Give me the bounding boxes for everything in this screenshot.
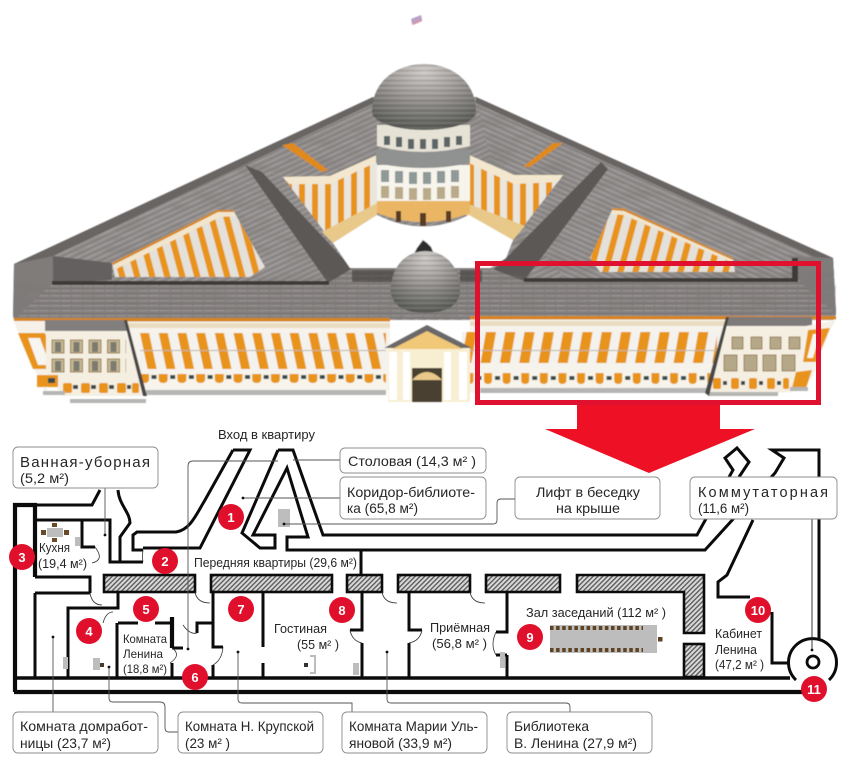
leader lines bbox=[52, 460, 813, 732]
label: Maria Ulyanova's room: яновой (33,9 м²) bbox=[349, 735, 452, 751]
room names on plan: Передняя квартиры (29,6 м²) bbox=[194, 555, 357, 570]
roof: dark ridges bbox=[14, 97, 833, 283]
label: maid's room: Комната домработ- bbox=[20, 718, 148, 734]
numbered markers: 6 bbox=[191, 670, 199, 685]
numbered markers: 11 bbox=[807, 682, 821, 697]
label: corridor library bbox=[340, 477, 486, 519]
label: Krupskaya's room: Комната Н. Крупской bbox=[185, 718, 314, 734]
roof: outer pentagon bbox=[13, 97, 836, 320]
furniture bbox=[41, 509, 505, 675]
label: dining room: Столовая (14,3 м² ) bbox=[348, 453, 476, 469]
label: Maria Ulyanova's room: Комната Марии Уль- bbox=[349, 718, 478, 734]
label: maid's room: ницы (23,7 м²) bbox=[20, 735, 111, 751]
front small dome with statue bbox=[391, 240, 460, 313]
numbered markers: 10 bbox=[751, 603, 765, 618]
hatched structural walls bbox=[104, 575, 704, 677]
front roof weathering bbox=[14, 270, 836, 318]
room names on plan: (19,4 м²) bbox=[38, 556, 87, 571]
left hip bbox=[13, 256, 53, 317]
facade right bbox=[462, 316, 836, 393]
room names on plan: Кухня bbox=[39, 540, 70, 555]
numbered markers: 2 bbox=[161, 554, 169, 569]
round tower bbox=[789, 639, 837, 680]
red arrow bbox=[545, 405, 755, 473]
front roof bbox=[13, 258, 836, 319]
label: Lenin's library bbox=[507, 712, 652, 753]
door arcs bbox=[90, 547, 496, 665]
right hip bbox=[790, 256, 836, 314]
back roof weathering bbox=[14, 97, 836, 316]
conference table bbox=[550, 625, 662, 653]
room names on plan: Комната bbox=[123, 632, 167, 646]
room names on plan: (47,2 м² ) bbox=[715, 657, 764, 672]
label: bathroom: (5,2 м²) bbox=[20, 470, 69, 486]
label: bathroom bbox=[13, 447, 158, 488]
numbered markers: 4 bbox=[85, 624, 93, 639]
caption: entrance: Вход в квартиру bbox=[218, 427, 315, 442]
label: lift bbox=[515, 477, 660, 519]
label: maid's room bbox=[13, 712, 158, 753]
room names on plan: Приёмная bbox=[430, 620, 490, 635]
room names on plan: Гостиная bbox=[274, 621, 327, 636]
label: lift: Лифт в беседку bbox=[536, 484, 640, 500]
room names on plan: Ленина bbox=[715, 642, 758, 657]
numbered markers: 3 bbox=[18, 550, 26, 565]
main dome bbox=[372, 64, 476, 130]
label: corridor library: ка (65,8 м²) bbox=[347, 500, 418, 516]
room partition walls bbox=[213, 550, 507, 678]
facade right wing bbox=[705, 317, 836, 396]
rear facade left bbox=[283, 155, 377, 243]
flag bbox=[411, 15, 422, 25]
facade left wing bbox=[14, 320, 147, 403]
orange roof accents bbox=[282, 143, 563, 172]
numbered markers: 1 bbox=[227, 510, 235, 525]
label: switchboard bbox=[690, 477, 837, 519]
label: Maria Ulyanova's room bbox=[342, 712, 487, 753]
room names on plan: (56,8 м² ) bbox=[432, 636, 487, 651]
room names on plan: (18,8 м²) bbox=[123, 662, 167, 676]
kitchen and service rooms walls bbox=[35, 490, 213, 678]
left courtyard facade bbox=[112, 210, 265, 277]
rotunda bbox=[372, 64, 476, 226]
central white court bbox=[333, 215, 513, 268]
numbered markers: 7 bbox=[237, 602, 245, 617]
room names on plan: Ленина bbox=[123, 647, 163, 661]
label: bathroom: Ванная-уборная bbox=[20, 454, 150, 471]
roof: right wing bbox=[476, 97, 836, 320]
building illustration bbox=[13, 64, 836, 403]
label: lift: на крыше bbox=[556, 500, 620, 516]
label: Krupskaya's room: (23 м² ) bbox=[185, 735, 230, 751]
room names on plan: (55 м² ) bbox=[297, 637, 339, 652]
room names on plan: Зал заседаний (112 м² ) bbox=[526, 605, 666, 620]
label: corridor library: Коридор-библиоте- bbox=[347, 484, 475, 500]
numbered markers bbox=[9, 504, 827, 702]
numbered markers: 5 bbox=[142, 602, 150, 617]
label: dining room bbox=[340, 448, 486, 473]
entrance corridor walls bbox=[133, 448, 819, 663]
outer corridor walls bbox=[14, 505, 802, 692]
room names on plan: Кабинет bbox=[715, 626, 762, 641]
facade left bbox=[14, 318, 390, 395]
rear facade right bbox=[466, 155, 563, 240]
roof shadow lines bbox=[52, 258, 798, 285]
room names on plan bbox=[38, 540, 764, 676]
numbered markers: 9 bbox=[526, 630, 534, 645]
portico bbox=[384, 325, 472, 402]
thick wall by Lenin's room bbox=[170, 617, 174, 648]
floor plan bbox=[14, 448, 837, 732]
numbered markers: 8 bbox=[338, 603, 346, 618]
red highlight frame bbox=[478, 264, 818, 402]
right courtyard facade bbox=[590, 208, 735, 272]
label: switchboard: Коммутаторная bbox=[698, 485, 828, 501]
label: Lenin's library: В. Ленина (27,9 м²) bbox=[514, 735, 637, 751]
label: Lenin's library: Библиотека bbox=[514, 718, 589, 734]
label: Krupskaya's room bbox=[178, 712, 323, 753]
label: switchboard: (11,6 м²) bbox=[698, 500, 749, 516]
